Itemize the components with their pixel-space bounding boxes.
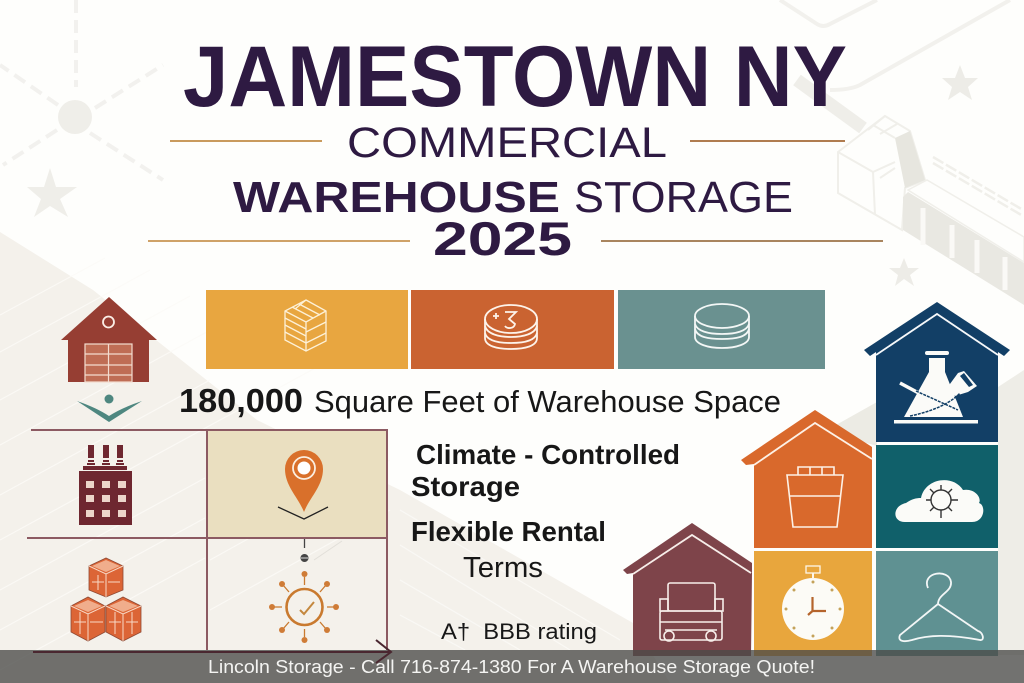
footer text: Lincoln Storage - Call 716-874-1380 For A Warehouse Storage Quote! bbox=[208, 657, 815, 677]
text: rating: A† BBB rating bbox=[441, 619, 597, 644]
background: isometric warehouse bbox=[838, 116, 1024, 305]
icon: coin stack with symbol bbox=[485, 305, 537, 349]
rule right of commercial bbox=[690, 140, 845, 142]
icon: flask bbox=[894, 351, 978, 424]
year: 2025 bbox=[433, 212, 572, 265]
house: maroon with vehicle icon bbox=[623, 523, 752, 656]
house block: teal with cloud icon bbox=[876, 445, 998, 548]
text: climate-controlled storage bbox=[411, 439, 680, 502]
title: JAMESTOWN NY bbox=[183, 29, 847, 125]
subtitle: warehouse storage bbox=[233, 173, 793, 222]
icon: boxes bbox=[71, 558, 141, 641]
panel: stepped houses bbox=[623, 302, 1010, 656]
house: orange with bucket icon bbox=[741, 410, 872, 548]
icon: connector dot bbox=[300, 539, 342, 562]
icon: sun with check mark bbox=[269, 571, 339, 643]
strip: teal with disc stack icon bbox=[618, 290, 825, 369]
icon: teal chevron with dot bbox=[77, 394, 142, 422]
background: beige diagonal area left bbox=[0, 232, 670, 683]
subtitle: commercial: COMMERCIAL bbox=[347, 119, 667, 167]
footer bar bbox=[0, 650, 1024, 683]
icon: bucket bbox=[787, 467, 843, 527]
text: flexible rental terms: Flexible Rental bbox=[411, 516, 606, 547]
strip: amber with stacked crate icon bbox=[206, 290, 408, 369]
background: star left bbox=[27, 168, 77, 217]
text: flexible rental terms bbox=[411, 516, 606, 584]
text: warehouse space: Square Feet of Warehouse Space bbox=[314, 384, 781, 419]
background: star right top bbox=[942, 65, 978, 100]
icon: location pin bbox=[278, 450, 328, 519]
strip: orange with coins icon bbox=[411, 290, 614, 369]
background: beige band behind houses bbox=[836, 370, 1024, 655]
house block: amber with clock icon bbox=[754, 551, 872, 656]
background: star right lower bbox=[889, 258, 919, 286]
panel: three colour strip bbox=[206, 290, 825, 369]
icon: hanger bbox=[899, 573, 983, 641]
grid cell: location highlight bbox=[207, 430, 387, 538]
text: warehouse space: 180,000 bbox=[179, 382, 303, 419]
text: flexible rental terms: Terms bbox=[463, 552, 543, 584]
icon: cloud and sun bbox=[895, 480, 983, 522]
icon: factory bbox=[79, 445, 132, 525]
icon: stopwatch bbox=[782, 566, 844, 640]
house block: grey teal with hanger icon bbox=[876, 551, 998, 656]
panel: location grid bbox=[27, 430, 387, 650]
subtitle: warehouse storage: WAREHOUSE bbox=[233, 173, 560, 222]
axis arrow bbox=[33, 640, 391, 663]
icon: disc stack bbox=[695, 304, 749, 348]
icon: warehouse house bbox=[61, 297, 157, 382]
icon: stacked crate bbox=[285, 300, 326, 351]
subtitle: warehouse storage: STORAGE bbox=[574, 173, 793, 222]
text: climate-controlled storage: Climate - Controlled bbox=[416, 439, 680, 470]
rule right of year bbox=[601, 240, 883, 242]
icon: vehicle bbox=[660, 583, 723, 641]
text: climate-controlled storage: Storage bbox=[411, 471, 520, 502]
rule left of commercial bbox=[170, 140, 322, 142]
background: road lines bbox=[780, 0, 1010, 128]
house: navy with flask icon bbox=[864, 302, 1010, 442]
rule left of year bbox=[148, 240, 410, 242]
background: network motif bbox=[0, 0, 163, 180]
